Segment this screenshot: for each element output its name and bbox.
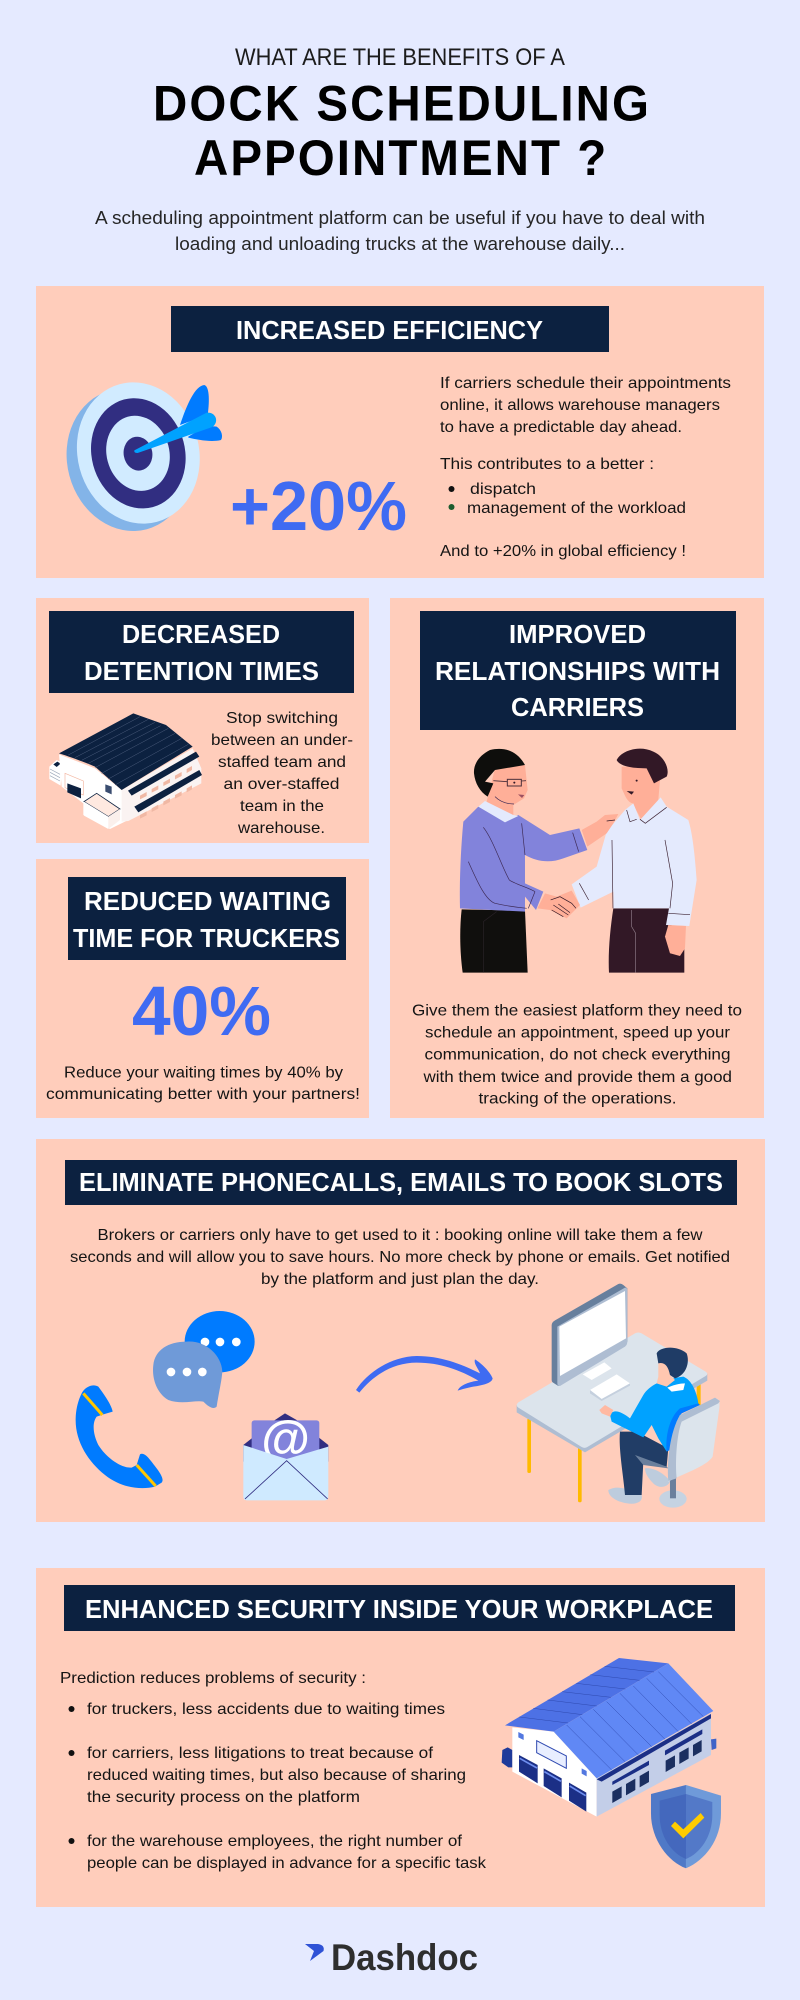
main title: DOCK SCHEDULING <box>153 76 649 132</box>
heading: reduced waiting time for truckers: TIME FOR TRUCKERS <box>73 923 340 953</box>
icon: email envelope <box>243 1411 328 1500</box>
text block: relationships: Give them the easiest platform they need to <box>412 1002 742 1020</box>
icon: phone <box>76 1385 163 1488</box>
intro paragraph <box>95 208 705 254</box>
heading: improved relationships with carriers: RELATIONSHIPS WITH <box>435 656 720 686</box>
intro paragraph: loading and unloading trucks at the warehouse daily... <box>175 234 625 254</box>
text block: relationships: tracking of the operations. <box>478 1090 676 1108</box>
text block: security list: reduced waiting times, but also because of sharing <box>87 1767 466 1784</box>
heading: decreased detention times: DETENTION TIMES <box>84 656 319 686</box>
panel: decreased detention times <box>36 598 369 843</box>
text block: security list: for carriers, less litigations to treat because of <box>87 1745 434 1762</box>
computer monitor <box>552 1284 630 1401</box>
panel: improved relationships <box>390 598 764 1118</box>
arrow <box>356 1356 493 1393</box>
text block: waiting times: communicating better with your partners! <box>46 1086 360 1103</box>
text block: detention: an over-staffed <box>224 776 340 793</box>
panel: increased efficiency <box>36 286 764 578</box>
intro paragraph: A scheduling appointment platform can be useful if you have to deal with <box>95 208 705 228</box>
heading: increased efficiency <box>171 306 609 352</box>
text block: efficiency description: And to +20% in global efficiency ! <box>440 543 686 560</box>
text block: security list: for the warehouse employees, the right number of <box>87 1833 463 1850</box>
text block: booking online: by the platform and just plan the day. <box>261 1271 539 1288</box>
heading: enhanced security <box>64 1585 735 1631</box>
heading: eliminate phonecalls <box>65 1160 737 1205</box>
header: title block <box>95 44 705 254</box>
panel: enhanced security <box>36 1568 765 1907</box>
right man <box>572 749 697 973</box>
text block: relationships: with them twice and provide them a good <box>422 1069 732 1086</box>
text block: efficiency description: This contributes to a better : <box>440 456 654 473</box>
warehouse <box>502 1658 716 1817</box>
heading: improved relationships with carriers: CARRIERS <box>511 692 644 722</box>
icon: shield with check <box>651 1785 721 1868</box>
text block: detention: Stop switching <box>226 710 338 727</box>
text block: relationships: communication, do not check everything <box>424 1046 730 1064</box>
text block: relationships: schedule an appointment, speed up your <box>425 1024 731 1042</box>
heading: eliminate phonecalls: ELIMINATE PHONECALLS, EMAILS TO BOOK SLOTS <box>79 1167 723 1197</box>
illustration: two men shaking hands <box>460 749 697 973</box>
text block: efficiency description: dispatch <box>470 481 536 498</box>
text block: booking online: Brokers or carriers only have to get used to it : booking online will take them a few <box>98 1227 703 1244</box>
icon: chat bubbles <box>153 1311 255 1408</box>
text block: efficiency description: If carriers schedule their appointments <box>440 375 731 392</box>
text block: waiting times: Reduce your waiting times by 40% by <box>64 1064 343 1082</box>
left man <box>460 749 618 973</box>
desk <box>517 1332 707 1502</box>
main title: APPOINTMENT ? <box>194 131 606 186</box>
heading: increased efficiency: INCREASED EFFICIENCY <box>236 315 543 345</box>
text block: booking online: seconds and will allow you to save hours. No more check by phone or emails. Get notified <box>70 1249 730 1266</box>
text block: efficiency description <box>440 375 731 560</box>
panel: eliminate phonecalls <box>36 1139 765 1522</box>
illustration: blue warehouse with shield <box>502 1658 721 1868</box>
text block: efficiency description: to have a predictable day ahead. <box>440 419 682 436</box>
logo: Dashdoc: Dashdoc <box>331 1937 478 1978</box>
text block: security list: people can be displayed in advance for a specific task <box>87 1855 487 1872</box>
panel: reduced waiting time <box>36 859 369 1118</box>
heading: improved relationships with carriers <box>420 611 736 730</box>
icon: target with dart <box>51 368 222 545</box>
text block: waiting times <box>46 1064 360 1103</box>
icon: dark roof warehouse <box>49 713 202 829</box>
heading: decreased detention times: DECREASED <box>122 619 280 649</box>
heading: reduced waiting time for truckers <box>68 877 346 960</box>
text block: relationships <box>412 1002 742 1108</box>
pre-title: WHAT ARE THE BENEFITS OF A <box>235 44 565 71</box>
text block: detention <box>211 710 353 837</box>
main title <box>153 76 649 186</box>
text block: booking online <box>70 1227 730 1288</box>
icon: email envelope: @ <box>261 1411 310 1467</box>
text block: efficiency description: management of the workload <box>467 500 686 517</box>
icons: phone, chat bubbles, email <box>76 1311 328 1500</box>
heading: improved relationships with carriers: IMPROVED <box>509 619 646 649</box>
heading: enhanced security: ENHANCED SECURITY INSIDE YOUR WORKPLACE <box>85 1594 713 1624</box>
stat: +20%: +20% <box>230 467 407 545</box>
heading: decreased detention times <box>49 611 354 693</box>
heading: reduced waiting time for truckers: REDUCED WAITING <box>84 886 331 916</box>
text block: detention: warehouse. <box>237 820 325 837</box>
man on chair <box>599 1348 720 1508</box>
text block: security list: for truckers, less accidents due to waiting times <box>87 1701 445 1718</box>
text block: security list <box>60 1670 487 1872</box>
text block: security list: the security process on the platform <box>87 1789 360 1806</box>
text block: efficiency description: online, it allows warehouse managers <box>440 397 720 414</box>
illustration: man at desk with computer <box>517 1284 720 1508</box>
text block: detention: team in the <box>240 798 324 815</box>
text block: detention: between an under- <box>211 732 353 749</box>
stat: 40%: 40% <box>132 972 271 1050</box>
text block: security list: Prediction reduces problems of security : <box>60 1670 366 1687</box>
text block: detention: staffed team and <box>218 754 346 771</box>
